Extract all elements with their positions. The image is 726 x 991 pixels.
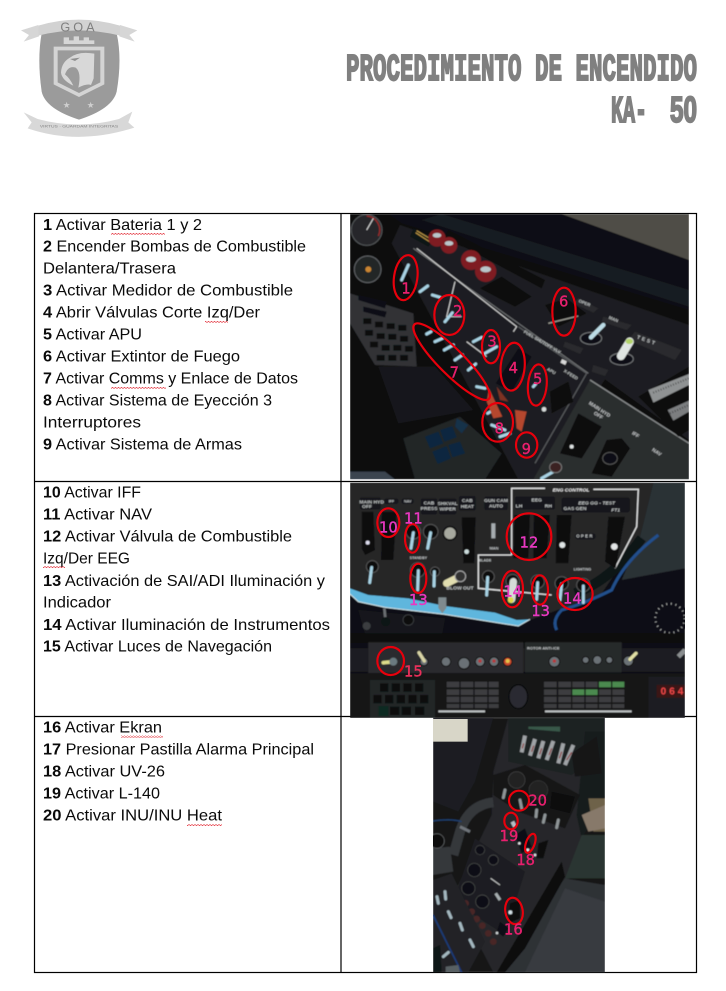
callout numbers 16 to 20 bbox=[500, 793, 547, 939]
callout numbers 10 to 15 bbox=[379, 510, 582, 681]
photo: lower panel with callouts 10 to 15: GUN CAM bbox=[484, 498, 508, 504]
photo: lower panel with callouts 10 to 15: SHKVAL bbox=[438, 501, 458, 507]
callout numbers 1 to 9: 9 bbox=[522, 441, 531, 458]
callout numbers 10 to 15: 13 bbox=[531, 603, 550, 620]
callout numbers 10 to 15: 15 bbox=[404, 664, 423, 681]
callout numbers 1 to 9: 2 bbox=[453, 303, 462, 320]
callout numbers 16 to 20: 18 bbox=[516, 852, 535, 869]
photo: lower panel with callouts 10 to 15: BLADE bbox=[479, 559, 492, 563]
photo: lower panel with callouts 10 to 15: EEG bbox=[531, 498, 542, 504]
subtitle: KA-50: 50 bbox=[670, 89, 697, 130]
photo: lower panel with callouts 10 to 15: IFF bbox=[389, 500, 395, 504]
photo: lower panel with callouts 10 to 15: HEAT bbox=[461, 504, 474, 510]
logo: GOA shield: ★ bbox=[87, 101, 95, 111]
text block: steps 10 to 15: Indicador bbox=[43, 595, 112, 612]
photo: lower panel with callouts 10 to 15: ENG CONTROL bbox=[553, 488, 589, 494]
text block: steps 16 to 20 bbox=[43, 720, 314, 826]
callout numbers 10 to 15: 10 bbox=[379, 520, 398, 537]
text block: steps 10 to 15: Izq/Der EEG bbox=[43, 550, 130, 567]
photo: overhead panel with callouts 1 to 9: FUEL SHUTOFF VLV bbox=[523, 329, 562, 355]
photo: lower panel with callouts 10 to 15: GAS GEN bbox=[563, 506, 587, 512]
photo: overhead panel with callouts 1 to 9: NAV bbox=[651, 447, 663, 458]
callout numbers 1 to 9 bbox=[401, 280, 568, 458]
callout rings 16 to 20 bbox=[503, 791, 538, 926]
text block: steps 1 to 9: 8 Activar Sistema de Eyección 3 bbox=[43, 393, 272, 410]
text block: steps 16 to 20: 16 Activar Ekran bbox=[43, 720, 162, 737]
panel: procedure table grid bbox=[34, 214, 696, 972]
text block: steps 1 to 9: 7 Activar Comms y Enlace de Datos bbox=[43, 370, 298, 387]
photo: lower panel with callouts 10 to 15: OFF bbox=[362, 504, 372, 510]
photo: lower panel with callouts 10 to 15: LH bbox=[516, 503, 523, 509]
photo: lower panel with callouts 10 to 15: MAN bbox=[489, 545, 499, 550]
photo: lower panel with callouts 10 to 15: WIPER bbox=[439, 507, 456, 513]
photo: overhead panel with callouts 1 to 9: OFF bbox=[592, 411, 604, 421]
photo: lower panel with callouts 10 to 15: LIGHTING bbox=[574, 568, 591, 572]
photo: side console with callouts 16 to 20 bbox=[430, 718, 605, 972]
photo: overhead panel with callouts 1 to 9: MAIN HYD bbox=[587, 401, 612, 419]
text block: steps 10 to 15: 10 Activar IFF bbox=[43, 484, 141, 501]
photo: lower panel with callouts 10 to 15: STANDBY bbox=[410, 556, 428, 560]
callout numbers 1 to 9: 6 bbox=[559, 294, 568, 311]
paper sheet bbox=[433, 719, 468, 742]
text block: steps 1 to 9: 5 Activar APU bbox=[43, 326, 142, 343]
photo: lower panel with callouts 10 to 15: NAV bbox=[404, 500, 412, 504]
text block: steps 10 to 15: 14 Activar Iluminación de Instrumentos bbox=[43, 617, 330, 634]
callout numbers 1 to 9: 5 bbox=[533, 371, 542, 388]
photo: overhead panel with callouts 1 to 9: TEST bbox=[636, 335, 658, 347]
callout numbers 16 to 20: 20 bbox=[528, 793, 547, 810]
photo: lower panel with callouts 10 to 15: BLOW OUT bbox=[446, 585, 474, 591]
callout rings 1 to 9 bbox=[391, 254, 576, 458]
callout numbers 1 to 9: 1 bbox=[401, 280, 411, 297]
text block: steps 16 to 20: 17 Presionar Pastilla Alarma Principal bbox=[43, 742, 314, 759]
photo: lower panel with callouts 10 to 15: OPER bbox=[576, 534, 594, 539]
text block: steps 1 to 9: Delantera/Trasera bbox=[43, 260, 176, 277]
text block: steps 16 to 20: 20 Activar INU/INU Heat bbox=[43, 807, 223, 824]
text block: steps 1 to 9 bbox=[43, 217, 306, 453]
logo: GOA shield bbox=[21, 20, 137, 137]
callout numbers 10 to 15: 14 bbox=[503, 584, 522, 601]
callout numbers 10 to 15: 12 bbox=[520, 534, 538, 551]
callout rings 10 to 15 bbox=[377, 508, 593, 675]
callout numbers 1 to 9: 7 bbox=[450, 364, 459, 381]
photo: lower panel with callouts 10 to 15: MAIN HYD bbox=[359, 499, 384, 505]
text block: steps 10 to 15: 13 Activación de SAI/ADI Iluminación y bbox=[43, 573, 325, 590]
callout numbers 10 to 15: 13 bbox=[409, 592, 428, 609]
photo: lower panel with callouts 10 to 15: EEG GG - TEST bbox=[578, 500, 616, 506]
photo: lower panel with callouts 10 to 15: 064 bbox=[661, 687, 684, 698]
text block: steps 1 to 9: 6 Activar Extintor de Fuego bbox=[43, 349, 240, 366]
text block: steps 10 to 15: 11 Activar NAV bbox=[43, 506, 152, 523]
photo: lower panel with callouts 10 to 15: CAB bbox=[462, 498, 473, 504]
photo: lower panel with callouts 10 to 15: FT1 bbox=[611, 507, 620, 513]
text block: steps 10 to 15: 12 Activar Válvula de Combustible bbox=[43, 529, 292, 546]
text block: steps 1 to 9: 4 Abrir Válvulas Corte Izq/Der bbox=[43, 304, 261, 321]
subtitle: KA-50: KA- bbox=[611, 91, 647, 134]
text block: steps 16 to 20: 18 Activar UV-26 bbox=[43, 763, 165, 780]
photo: overhead panel with callouts 1 to 9 bbox=[350, 214, 689, 479]
photo: lower panel with callouts 10 to 15: AUTO bbox=[489, 504, 503, 510]
callout numbers 1 to 9: 4 bbox=[509, 360, 518, 377]
photo: overhead panel with callouts 1 to 9: X-FEED bbox=[563, 368, 579, 381]
photo: lower panel with callouts 10 to 15 bbox=[350, 483, 689, 718]
callout numbers 16 to 20: 19 bbox=[500, 828, 518, 845]
text block: steps 1 to 9: Interruptores bbox=[43, 415, 141, 432]
callout numbers 16 to 20: 16 bbox=[504, 922, 523, 939]
logo: GOA shield: VIRTUS · GUARDAM INTEGRITAS bbox=[40, 124, 119, 129]
callout numbers 1 to 9: 8 bbox=[495, 420, 504, 437]
text block: steps 16 to 20: 19 Activar L-140 bbox=[43, 786, 160, 803]
logo: GOA shield: GOA bbox=[60, 21, 98, 35]
photo: overhead panel with callouts 1 to 9: MAN bbox=[608, 315, 619, 323]
text block: steps 1 to 9: 1 Activar Bateria 1 y 2 bbox=[43, 217, 202, 234]
text block: steps 10 to 15: 15 Activar Luces de Navegación bbox=[43, 639, 272, 656]
photo: overhead panel with callouts 1 to 9: OPER bbox=[578, 298, 592, 308]
photo: lower panel with callouts 10 to 15: ROTOR ANTI-ICE bbox=[527, 645, 560, 650]
text block: steps 1 to 9: 9 Activar Sistema de Armas bbox=[43, 436, 242, 453]
logo: GOA shield: ★ bbox=[63, 101, 71, 111]
text block: steps 1 to 9: 2 Encender Bombas de Combustible bbox=[43, 239, 306, 256]
photo: lower panel with callouts 10 to 15: PRESS bbox=[421, 506, 438, 512]
text block: steps 1 to 9: 3 Activar Medidor de Combustible bbox=[43, 283, 293, 300]
callout numbers 10 to 15: 14 bbox=[563, 591, 582, 608]
photo: overhead panel with callouts 1 to 9: IFF bbox=[631, 431, 640, 440]
callout numbers 1 to 9: 3 bbox=[487, 334, 497, 351]
photo: lower panel with callouts 10 to 15: CAB bbox=[424, 500, 435, 506]
photo: overhead panel with callouts 1 to 9: APU bbox=[546, 367, 557, 375]
text block: steps 10 to 15 bbox=[43, 484, 330, 656]
photo: lower panel with callouts 10 to 15: RH bbox=[545, 503, 552, 509]
callout numbers 10 to 15: 11 bbox=[404, 510, 423, 527]
